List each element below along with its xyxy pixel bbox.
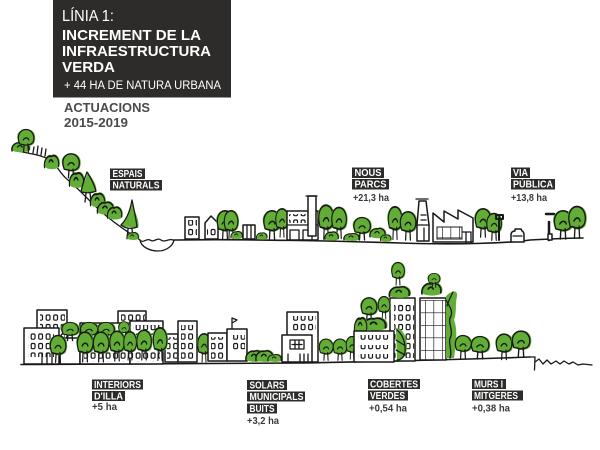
label: cobertes verdes [368, 379, 420, 414]
upper town: building and chimney [287, 196, 348, 240]
hillside with trees [12, 129, 140, 240]
title banner: VERDA [62, 59, 115, 76]
label: cobertes verdes: COBERTES [370, 380, 418, 391]
label: interiors d'illa: D'ILLA [94, 392, 123, 402]
label: murs i mitgeres: MURS I [474, 380, 503, 391]
label: espais naturals: NATURALS [112, 181, 160, 192]
green roofs building [354, 262, 415, 362]
coastline wave [530, 357, 592, 370]
title banner: + 44 HA DE NATURA URBANA [64, 80, 221, 92]
title banner: INFRAESTRUCTURA [62, 43, 211, 60]
ground line: upper [174, 238, 583, 244]
lower town: courtyard trees [49, 322, 211, 362]
title banner: INCREMENT DE LA [62, 27, 201, 44]
upper town: houses [185, 209, 289, 240]
label: nous parcs: NOUS [354, 168, 382, 179]
subtitle: actuacions [64, 100, 150, 130]
label: solars municipals buits: BUITS [250, 404, 275, 415]
hospital [282, 312, 359, 362]
pond [140, 239, 174, 251]
title banner [53, 0, 231, 98]
label: cobertes verdes: VERDES [370, 391, 405, 402]
street trees, car and lamps [474, 206, 587, 242]
label: nous parcs [352, 168, 389, 204]
label: solars municipals buits [247, 380, 305, 427]
subtitle: actuacions: ACTUACIONS [64, 100, 150, 115]
label: interiors d'illa [92, 380, 143, 413]
lower town: municipal buildings [208, 318, 282, 362]
new parks: vegetation [325, 206, 417, 242]
label: murs i mitgeres: +0,38 ha [472, 404, 510, 414]
label: via publica [511, 168, 555, 204]
label: via publica: +13,8 ha [511, 193, 547, 204]
lower town: courtyard blocks [24, 310, 197, 364]
label: espais naturals [110, 168, 162, 192]
ground line: lower [21, 357, 530, 364]
label: espais naturals: ESPAIS [112, 169, 143, 180]
label: via publica: PÚBLICA [513, 178, 553, 191]
label: nous parcs: +21,3 ha [353, 193, 389, 204]
label: interiors d'illa: +5 ha [92, 402, 117, 413]
label: via publica: VIA [513, 168, 528, 179]
trees at the end of the street [454, 331, 531, 360]
factory [433, 210, 473, 243]
factory chimney [416, 199, 429, 241]
label: murs i mitgeres: MITGERES [474, 391, 518, 402]
label: murs i mitgeres [472, 379, 523, 414]
label: solars municipals buits: SOLARS [250, 381, 285, 392]
subtitle: actuacions: 2015-2019 [64, 115, 128, 130]
label: interiors d'illa: INTERIORS [94, 380, 141, 391]
label: solars municipals buits: +3,2 ha [247, 416, 279, 427]
green wall tower [420, 273, 457, 360]
label: nous parcs: PARCS [354, 180, 387, 191]
label: cobertes verdes: +0,54 ha [369, 404, 407, 414]
title banner: LÍNIA 1: [62, 8, 114, 25]
label: solars municipals buits: MUNICIPALS [250, 392, 304, 403]
